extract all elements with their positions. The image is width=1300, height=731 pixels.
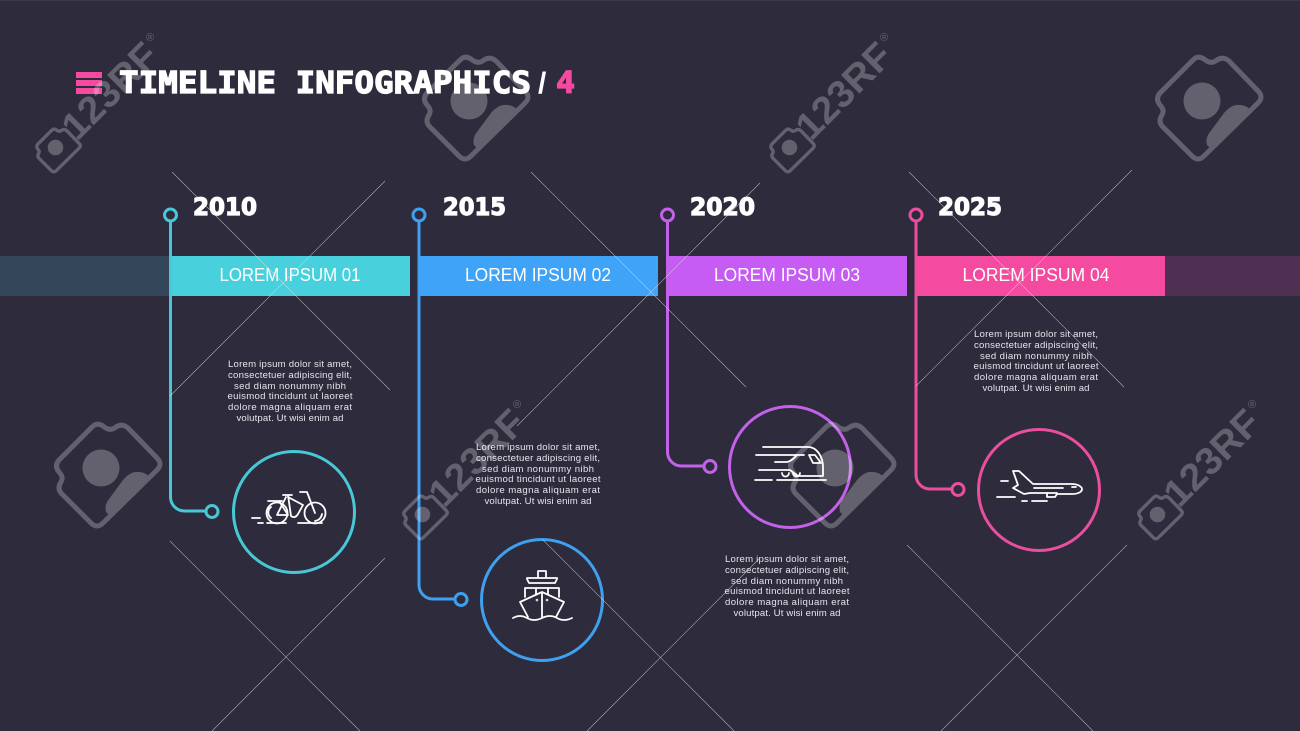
title slash: /	[538, 67, 547, 100]
end node 01	[206, 506, 218, 518]
bar label 03: LOREM IPSUM 03	[714, 265, 860, 285]
bar: lorem ipsum 02	[419, 256, 658, 296]
band: faded left extension	[0, 256, 170, 296]
bar: lorem ipsum 03	[667, 256, 907, 296]
icon circle 02	[482, 540, 602, 660]
bar label 04: LOREM IPSUM 04	[962, 265, 1110, 285]
title	[76, 66, 575, 101]
text block 03: consectetuer adipiscing elit,	[725, 565, 849, 576]
watermark egg large 4	[790, 424, 894, 526]
watermark mark 1	[37, 32, 167, 172]
text block 02: euismod tincidunt ut laoreet	[476, 474, 601, 485]
text block 03	[724, 554, 850, 619]
year 2015: 2015	[443, 193, 506, 221]
bar: lorem ipsum 04	[915, 256, 1165, 296]
text block 01: Lorem ipsum dolor sit amet,	[228, 359, 352, 370]
text block 04: dolore magna aliquam erat	[974, 372, 1098, 383]
top node 03	[662, 209, 674, 221]
icon: title menu bars	[76, 72, 102, 94]
text block 02: sed diam nonummy nibh	[482, 464, 594, 475]
icon: airplane	[997, 471, 1082, 501]
end node 03	[704, 460, 716, 472]
icon circle 04	[978, 430, 1100, 550]
connector 02	[419, 221, 454, 599]
text block 04	[974, 329, 1099, 394]
text block 03: dolore magna aliquam erat	[725, 597, 849, 608]
milestone 2025	[910, 193, 1165, 550]
text block 02	[476, 442, 601, 507]
watermark mark 1: ®	[146, 32, 154, 44]
watermark: egg logos and 123RF text	[37, 32, 1269, 539]
band: faded right extension	[1165, 256, 1300, 296]
text block 02: Lorem ipsum dolor sit amet,	[476, 442, 600, 453]
title text: TIMELINE INFOGRAPHICS	[119, 66, 531, 101]
text block 01: dolore magna aliquam erat	[228, 402, 352, 413]
text block 03: euismod tincidunt ut laoreet	[724, 586, 850, 597]
icon circle 01	[234, 452, 354, 572]
end node 04	[952, 484, 964, 496]
watermark egg large 2	[1158, 57, 1261, 159]
year 2025: 2025	[938, 193, 1002, 221]
connector 04	[916, 221, 951, 489]
icon: ship	[513, 571, 572, 620]
top node 04	[910, 209, 922, 221]
text block 04: Lorem ipsum dolor sit amet,	[974, 329, 1098, 340]
text block 04: euismod tincidunt ut laoreet	[974, 361, 1099, 372]
text block 03: volutpat. Ut wisi enim ad	[734, 608, 840, 619]
watermark mark 3: ®	[513, 399, 521, 411]
watermark mark 1: 123RF	[54, 35, 167, 148]
text block 04: sed diam nonummy nibh	[980, 351, 1092, 362]
text block 01	[228, 359, 353, 424]
bar: lorem ipsum 01	[170, 256, 410, 296]
title number: 4	[556, 66, 575, 101]
watermark mark 4: ®	[1248, 399, 1256, 411]
text block 02: consectetuer adipiscing elit,	[476, 453, 600, 464]
watermark mark 2: 123RF	[788, 35, 901, 148]
text block 03: Lorem ipsum dolor sit amet,	[725, 554, 849, 565]
connector 03	[668, 221, 703, 466]
watermark mark 3: 123RF	[421, 402, 534, 515]
watermark: thin diagonal lines	[170, 170, 1132, 731]
icon: train	[755, 447, 826, 480]
bar label 01: LOREM IPSUM 01	[220, 265, 360, 285]
icon: bicycle	[252, 492, 326, 524]
text block 04: consectetuer adipiscing elit,	[974, 340, 1098, 351]
watermark mark 4: 123RF	[1156, 402, 1269, 515]
icon circle 03	[730, 406, 850, 528]
text block 01: euismod tincidunt ut laoreet	[228, 391, 353, 402]
watermark egg large 3	[56, 424, 160, 526]
watermark egg large 1	[424, 57, 528, 159]
milestone 2010	[164, 193, 410, 572]
top node 01	[164, 209, 176, 221]
watermark mark 4	[1139, 399, 1269, 539]
year 2010: 2010	[193, 193, 257, 221]
watermark mark 2: ®	[880, 32, 888, 44]
text block 02: dolore magna aliquam erat	[476, 485, 600, 496]
text block 02: volutpat. Ut wisi enim ad	[484, 496, 592, 507]
text block 01: volutpat. Ut wisi enim ad	[236, 413, 344, 424]
bar label 02: LOREM IPSUM 02	[465, 265, 611, 285]
connector 01	[170, 221, 205, 511]
year 2020: 2020	[690, 193, 755, 221]
end node 02	[455, 594, 467, 606]
top node 02	[413, 209, 425, 221]
text block 03: sed diam nonummy nibh	[731, 576, 843, 587]
text block 01: consectetuer adipiscing elit,	[228, 370, 352, 381]
text block 01: sed diam nonummy nibh	[234, 381, 346, 392]
milestone 2020	[662, 193, 907, 619]
watermark mark 3	[404, 399, 534, 539]
text block 04: volutpat. Ut wisi enim ad	[982, 383, 1090, 394]
milestone 2015	[413, 193, 658, 660]
watermark mark 2	[771, 32, 901, 172]
